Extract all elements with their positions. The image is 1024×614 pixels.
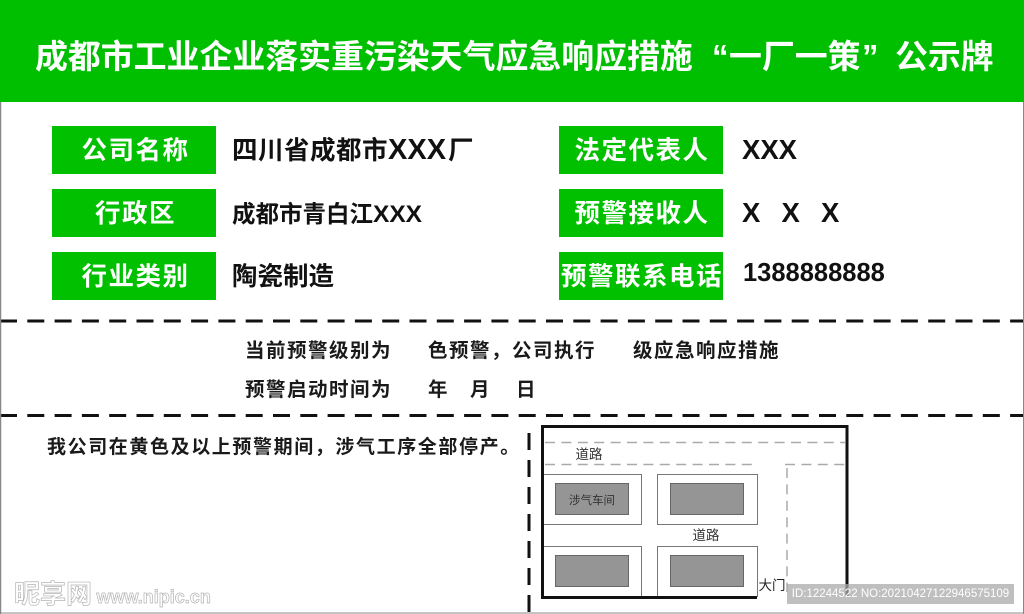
value: industry: 陶瓷制造 (232, 263, 334, 291)
building lots (544, 474, 758, 596)
watermark logo: 昵享网 www.nipic.cn (14, 579, 211, 609)
label: alert phone: 预警联系电话 (561, 263, 723, 291)
value: company name: 四川省成都市XXX厂 (232, 134, 474, 166)
outer boundary (542, 426, 847, 598)
label: district (52, 189, 216, 237)
label: alert recipient (559, 189, 723, 237)
label: legal representative: 法定代表人 (574, 137, 710, 165)
label: alert recipient: 预警接收人 (574, 200, 710, 228)
workshops (556, 484, 744, 586)
label: legal representative (559, 126, 723, 174)
alert level line: 当前预警级别为 色预警，公司执行 级应急响应措施 (245, 340, 780, 362)
title: 成都市工业企业落实重污染天气应急响应措施 (35, 38, 693, 75)
title: 公示牌 (895, 38, 994, 75)
shutdown statement: 我公司在黄色及以上预警期间，涉气工序全部停产。 (47, 437, 521, 458)
label: district: 行政区 (95, 200, 176, 228)
title (35, 38, 994, 75)
label: alert phone (559, 252, 723, 300)
title: “ (712, 38, 728, 75)
road label top: 道路 (576, 447, 603, 462)
road dashed edges (545, 442, 845, 592)
value: alert recipient: X X X (742, 197, 839, 228)
alert start time line: 预警启动时间为 年 月 日 (245, 379, 537, 401)
workshop label: 涉气车间 (569, 493, 615, 507)
watermark id strip (787, 584, 1014, 604)
value: legal representative: XXX (742, 134, 797, 165)
title: 一厂一策 (729, 38, 861, 75)
label: industry: 行业类别 (81, 263, 190, 291)
value: alert phone: 1388888888 (743, 259, 885, 287)
watermark id strip: ID:12244522 NO:20210427122946575109 (792, 588, 1009, 600)
title banner (0, 0, 1024, 102)
value: district: 成都市青白江XXX (232, 201, 422, 228)
label: industry (52, 252, 216, 300)
site plan diagram (541, 425, 848, 599)
gate label: 大门 (758, 578, 786, 593)
label: company name (52, 126, 216, 174)
road label middle: 道路 (692, 528, 720, 543)
title: ” (862, 38, 878, 75)
label: company name: 公司名称 (81, 137, 190, 165)
